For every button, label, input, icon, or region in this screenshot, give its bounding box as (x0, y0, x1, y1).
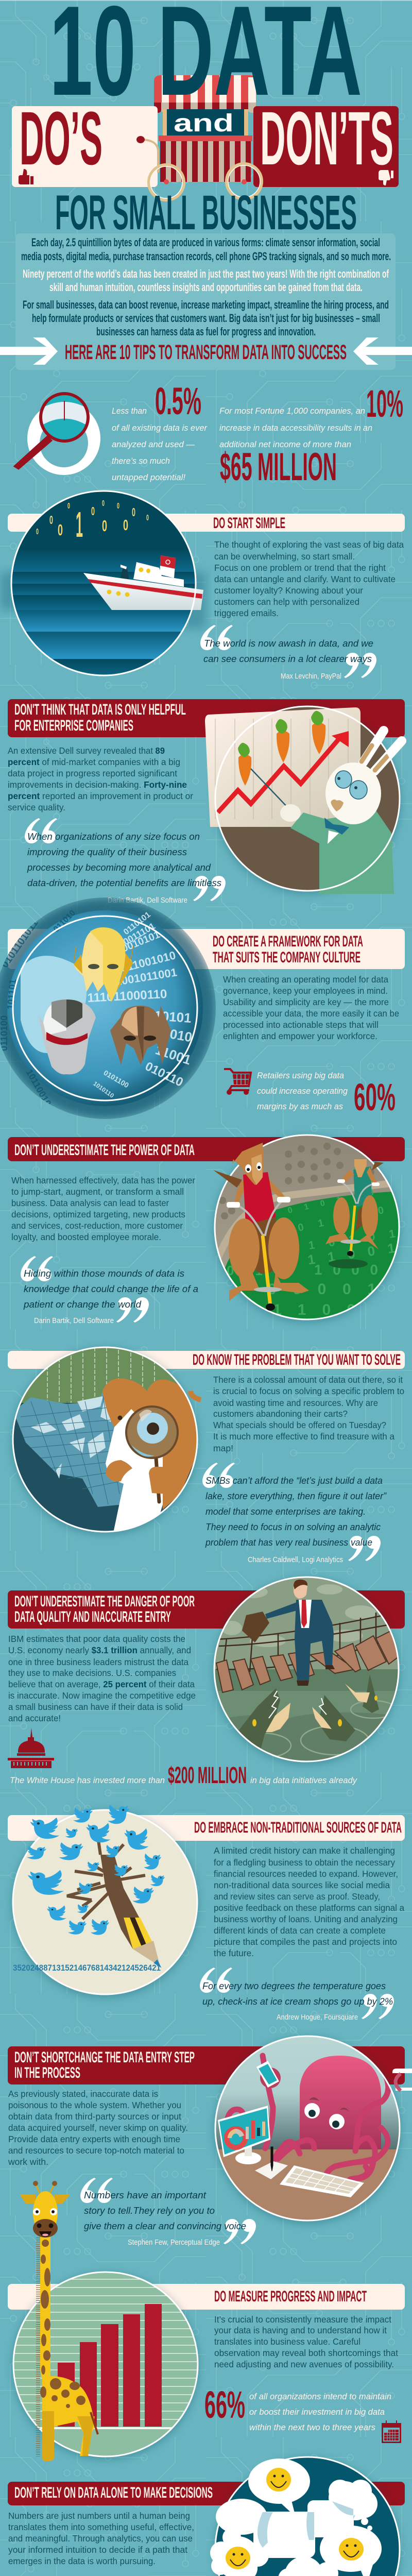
body text: the future. (214, 1948, 254, 1958)
body text: need adjusting and new avenues of possibility. (214, 2359, 394, 2369)
heading text: DATA QUALITY AND INACCURATE ENTRY (14, 1608, 171, 1625)
heading band (8, 2482, 405, 2505)
bubbles (210, 2459, 382, 2576)
body text: and resources to secure top-notch material to (8, 2145, 184, 2156)
heading text: DON’T SHORTCHANGE THE DATA ENTRY STEP (14, 2049, 195, 2066)
paper and pen (255, 2161, 288, 2179)
binary stars: 0 (36, 528, 39, 536)
body text: It’s crucial to consistently measure the impact (214, 2314, 391, 2325)
section 4: don't underestimate the power of data (8, 1133, 405, 1325)
binary stars: 0 (146, 514, 149, 522)
illustration: helmets in a data tunnel: 1001011001 (114, 965, 178, 988)
heading band (8, 2284, 405, 2310)
body text: There is a colossal amount of data out there, so it (213, 1375, 403, 1385)
illustration: businessman on rope bridge over alligators (213, 1575, 400, 1765)
heading band (8, 1815, 405, 1841)
body text: different kinds of data can create a complete (214, 1925, 386, 1936)
icon: closing quote mark (362, 1994, 394, 2019)
binary stars: 0 (91, 504, 95, 518)
body text (8, 2511, 194, 2566)
panel: introduction (0, 233, 412, 370)
quote: Andrew Hogue, Foursquare (277, 2013, 358, 2022)
illustration: helmets in a data tunnel: 0010101 (139, 1007, 192, 1026)
body text: they use to make decisions. U.S. companies (8, 1668, 176, 1678)
body text: is inaccurate. Now imagine the competitive edge (8, 1690, 196, 1701)
quote: They need to focus in on solving an analytic (205, 1521, 381, 1532)
body text: data project in progress reported significant (8, 768, 177, 778)
illustration: helmets in a data tunnel: 101101 (5, 979, 18, 1010)
body text: It is much more effective to find treasure with a (213, 1431, 394, 1442)
icon: closing quote mark (193, 876, 226, 901)
quote: knowledge that could change the life of a (24, 1283, 198, 1294)
quote (80, 2178, 256, 2247)
body text (214, 2314, 398, 2369)
body text: poisonous to the whole system. Whether you (8, 2100, 181, 2110)
body text: observation may reveal both shortcomings that (214, 2348, 398, 2358)
gold helmet (74, 927, 133, 1002)
tree and pencil (67, 1837, 160, 1967)
carrots (238, 711, 325, 786)
stat: 60 percent: Retailers using big data (257, 1071, 344, 1080)
heading text: DON’T UNDERESTIMATE THE POWER OF DATA (14, 1142, 195, 1159)
illustration: dog with magnifying glass over map (12, 1345, 201, 1535)
body text: IBM estimates that poor data quality costs the (8, 1634, 185, 1644)
tentacle with scrap on right edge (392, 2069, 412, 2091)
body text: picture that compiles the past and projects into (214, 1937, 397, 1947)
section 8: don't shortchange data entry (8, 2035, 412, 2247)
icon: thumbs down (379, 170, 393, 185)
section 1: do start simple (0, 489, 405, 681)
number stream: 3520248871315214676814342124526421 (13, 1963, 161, 1973)
quote (200, 625, 376, 681)
stat: 10 percent: additional net income of more than (219, 439, 351, 449)
body text: loyalty, and boosted employee morale. (11, 1232, 161, 1242)
heading text (14, 2049, 195, 2081)
body text (214, 1845, 404, 1958)
intro paragraph 3 (23, 298, 389, 338)
icon: opening quote mark (21, 1256, 53, 1281)
body text: When creating an operating model for data (223, 974, 388, 985)
birds (27, 1804, 165, 1935)
stat: 0.5 percent: Less than (112, 406, 147, 416)
quote: When organizations of any size focus on (27, 831, 200, 842)
body text (214, 539, 404, 618)
body text: percent of mid-market companies with a big (8, 757, 180, 767)
large kangaroo (213, 1143, 309, 1311)
body text: and review sites can serve as proof. Steady, (214, 1891, 380, 1902)
heading band (8, 2046, 405, 2084)
icon: opening quote mark (200, 625, 233, 650)
heading text (14, 701, 186, 734)
stat: 10 percent (219, 382, 403, 489)
heading text: DO START SIMPLE (213, 515, 285, 532)
body text (223, 974, 399, 1041)
quote: SMBs can’t afford the “let’s just build a data (205, 1475, 383, 1486)
stat: 10 percent: increase in data accessibility results in an (219, 423, 372, 433)
section 2: don't think data is only for enterprise (8, 699, 405, 905)
body text: An extensive Dell survey revealed that 89 (8, 745, 165, 756)
body text: your informed intuition to decide if a path that (8, 2545, 187, 2555)
icon: opening quote mark (200, 1968, 232, 1993)
quote: processes by becoming more analytical and (27, 862, 211, 873)
illustration: helmets in a data tunnel: 0101101011 (0, 918, 41, 970)
body text: avoid wasting time and resources. Why are (213, 1398, 378, 1408)
arrow: right pointing (0, 337, 58, 365)
icon: opening quote mark (202, 1463, 235, 1488)
body text (8, 2089, 188, 2167)
body text: one in three business leaders mistrust the data (8, 1657, 188, 1667)
body text: obtain data from third-party sources or input (8, 2111, 181, 2122)
body text: customer loyalty? Knowing about your (214, 585, 363, 596)
body text: improvements in decision-making. Forty-nine (8, 779, 187, 790)
heading band (8, 514, 405, 532)
heading text: FOR ENTERPRISE COMPANIES (14, 717, 133, 734)
body text: work with. (8, 2157, 48, 2167)
binary stars: 0 (102, 499, 105, 508)
illustration: helmets in a data tunnel (0, 897, 216, 1119)
body text: is crucial to focus on solving a specific problem to (213, 1386, 404, 1396)
stat: 0.5 percent: analyzed and used — (112, 439, 195, 449)
illustration: pencil tree with birds (13, 1804, 197, 1996)
body text: can be overwhelming, so start small. (214, 551, 355, 562)
body text: What specials should be offered on Tuesday? (213, 1420, 386, 1430)
quote: lake, store everything, then figure it out later” (205, 1490, 387, 1501)
illustration: ship in a sea of data (0, 489, 206, 680)
body text: triggered emails. (214, 608, 279, 618)
illustration: helmets in a data tunnel: 0101100 (102, 1069, 130, 1090)
body text: The thought of exploring the vast seas of big data (214, 539, 404, 550)
quote: can see consumers in a lot clearer ways (203, 653, 372, 664)
illustration: octopus at a desk (214, 2035, 402, 2224)
illustration: helmets in a data tunnel: 0110101 (122, 910, 152, 937)
smileys (226, 2468, 364, 2569)
section 6: don't underestimate the danger of poor data (8, 1575, 405, 1788)
quote: For every two degrees the temperature goes (202, 1980, 386, 1991)
body text: and meaningful. Through analytics, you can use (8, 2533, 193, 2544)
stat: 66 percent: 66% (204, 2383, 245, 2426)
body text: financial resources needed to expand. However, (214, 1869, 398, 1879)
illustration: kangaroos on pogo sticks: 1 0 0 0 0 (314, 1262, 397, 1278)
keyboard (280, 2165, 364, 2197)
body text: for a fledgling business to obtain the necessary (214, 1857, 395, 1868)
quote (202, 1463, 387, 1564)
intro paragraph 2 (23, 267, 389, 294)
illustration: kangaroos on pogo sticks: 0 1 (227, 1263, 263, 1278)
illustration: rabbit presenting carrot chart (205, 706, 402, 894)
heading text: IN THE PROCESS (14, 2064, 80, 2081)
icon: capitol building (8, 1728, 54, 1768)
illustration: giraffe measuring bar chart (10, 2181, 201, 2461)
illustration: helmets in a data tunnel: 101100101 (24, 1067, 56, 1112)
illustration: helmets in a data tunnel: 111011000110 (87, 987, 167, 1005)
section 7: do embrace non-traditional sources (8, 1804, 405, 2022)
quote: model that some enterprises are taking. (205, 1506, 366, 1517)
body text: governance, keep your employees in mind. (223, 986, 388, 996)
illustration: helmets in a data tunnel: 10011101 (117, 921, 157, 950)
quote (21, 1256, 198, 1325)
body text: emerges in the data is worth pursuing. (8, 2556, 156, 2566)
silver helmet (39, 999, 96, 1074)
quote: Stephen Few, Perceptual Edge (128, 2239, 220, 2247)
stat: 200 million: The White House has invested more than (10, 1775, 165, 1785)
binary stars (36, 499, 149, 545)
quote: patient or change the world (23, 1299, 142, 1310)
binary stars: 0 (102, 517, 107, 535)
body text: A limited credit history can make it challenging (214, 1845, 395, 1856)
body text (11, 1175, 195, 1242)
stat: 0.5 percent: of all existing data is ever (112, 423, 208, 433)
icon: opening quote mark (25, 818, 57, 843)
body text: business worthy of loans. Uniting and analyzing (214, 1914, 398, 1924)
quote: Numbers have an important (84, 2190, 207, 2200)
bridge planks (216, 1631, 399, 1692)
quote: The world is now awash in data, and we (204, 638, 373, 649)
heading band (8, 1590, 405, 1629)
section 6: don't underestimate the danger of poor data: DON’T UNDERESTIMATE THE DANGER OF POOR (14, 1593, 195, 1610)
bronze helmet (110, 1006, 171, 1065)
stat: 200 million: $200 MILLION (168, 1762, 247, 1788)
body text: data can untangle and clarify. Want to cultivate (214, 574, 396, 584)
arrow: left pointing (353, 337, 412, 365)
rabbit (280, 731, 402, 894)
quote: up, check-ins at ice cream shops go up by 2% (202, 1996, 393, 2007)
icon: shopping cart (224, 1069, 251, 1095)
quote: give them a clear and convincing voice (84, 2221, 246, 2231)
heading text: DON'T THINK THAT DATA IS ONLY HELPFUL (14, 701, 186, 718)
quote: story to tell.They rely on you to (84, 2205, 215, 2216)
quote: Darin Bartik, Dell Software (34, 1317, 114, 1325)
quote (25, 818, 226, 905)
illustration: kangaroos on pogo sticks (213, 1133, 402, 1324)
alligators (234, 1674, 396, 1758)
intro paragraph 1 (21, 236, 391, 263)
body text: to jump-start, augment, or transform a small (11, 1187, 184, 1197)
icon: closing quote mark (116, 1297, 149, 1323)
illustration: helmets in a data tunnel: 010110 (143, 1059, 185, 1090)
stat: 0.5 percent: there’s so much (112, 456, 170, 466)
binary stars: 0 (123, 517, 128, 534)
phone (256, 2061, 281, 2088)
section 9: do measure progress (8, 2181, 405, 2461)
businessman (242, 1580, 335, 1686)
stat: 60 percent: margins by as much as (257, 1101, 343, 1111)
illustration: helmets in a data tunnel: 011010 (52, 909, 77, 934)
cart stand (136, 109, 262, 200)
quote: improving the quality of their business (27, 846, 187, 857)
illustration: helmets in a data tunnel: 01010 (154, 1023, 193, 1045)
stat: 60 percent: could increase operating (257, 1086, 348, 1096)
panel: do's (12, 96, 158, 187)
heading text (213, 933, 363, 966)
heading band (8, 699, 405, 737)
body text: customers can help with personalized (214, 597, 359, 607)
binary stars: 0 (67, 502, 70, 511)
label: and: and (174, 110, 234, 137)
illustration: speech bubbles with smileys (210, 2457, 400, 2576)
body text: percent reported an improvement in product or (8, 791, 193, 801)
illustration: kangaroos on pogo sticks: 0 1 0 1 0 (297, 1205, 385, 1234)
stat: 60 percent (257, 1071, 396, 1118)
body text: Numbers are just numbers until a human being (8, 2511, 190, 2521)
body text: As previously stated, inaccurate data is (8, 2089, 158, 2099)
icon: thumbs up (19, 169, 33, 184)
body text: map! (213, 1443, 233, 1453)
body text: believe that on average, 25 percent of their data (8, 1679, 195, 1689)
body text: translates into business value. Careful (214, 2336, 360, 2347)
icon: calendar (382, 2420, 401, 2443)
heading text: DON’T RELY ON DATA ALONE TO MAKE DECISIONS (14, 2484, 213, 2501)
section 5: do know the problem (8, 1345, 405, 1564)
illustration: kangaroos on pogo sticks: 0 0 0 0 1 (268, 1281, 376, 1298)
quote (200, 1968, 394, 2022)
binary stars: 0 (132, 505, 135, 519)
stat: 66 percent (204, 2383, 391, 2432)
monitor (218, 2106, 270, 2164)
section 3: do create a framework (0, 897, 405, 1119)
body text: Usability and simplicity are key — the more (223, 997, 389, 1007)
binary stars: 0 (117, 502, 119, 511)
illustration: kangaroos on pogo sticks: 0 1 0 1 0 0 (287, 1189, 374, 1215)
stat: 0.5 percent: 0.5% (155, 380, 201, 422)
illustration: kangaroos on pogo sticks: 1 1 1 0 0 1 (287, 1240, 396, 1270)
stat: 66 percent: of all organizations intend to maintain (249, 2392, 391, 2401)
illustration: helmets in a data tunnel: 11001 (153, 1042, 193, 1068)
illustration: helmets in a data tunnel: 1010110 (92, 1080, 115, 1099)
heading band (8, 1351, 405, 1369)
binary stars: 1 (76, 504, 83, 545)
body text: Focus on one problem or trend that the right (214, 563, 386, 573)
stat: 200 million: in big data initiatives already (250, 1775, 357, 1785)
body text: enlighten and empower your workforce. (223, 1031, 377, 1041)
body text: processed into actionable steps that will (223, 1020, 379, 1030)
arrow chart line (218, 731, 349, 812)
body text (213, 1375, 404, 1453)
stat: 0.5 percent: untapped potential! (112, 472, 185, 482)
body text: translates them into something useful, effective, (8, 2522, 194, 2532)
body text: U.S. economy nearly $3.1 trillion annually, and (8, 1645, 191, 1655)
stat: 66 percent: or boost their investment in big data (249, 2407, 385, 2417)
bar chart (58, 2304, 162, 2427)
body text: Provide data entry experts with enough time (8, 2134, 180, 2144)
icon: closing quote mark (348, 1536, 381, 1561)
quote: Darin Bartik, Dell Software (108, 896, 187, 905)
body text: a small business can have if their data is solid (8, 1702, 183, 1712)
cart awning (154, 75, 256, 113)
quote: problem that has very real business value (205, 1537, 372, 1548)
body text: decisions, optimized targeting, new products (11, 1209, 185, 1219)
body text: and services, cost-reduction, more customer (11, 1221, 183, 1231)
binary stars: 0 (49, 513, 53, 527)
stat: 0.5 percent (112, 380, 208, 482)
giraffe (20, 2181, 98, 2461)
icon: closing quote mark (344, 653, 376, 678)
body text (8, 1634, 196, 1723)
stat: 10 percent: For most Fortune 1,000 companies, an (219, 406, 365, 416)
panel: don'ts (253, 96, 399, 187)
quote: data-driven, the potential benefits are limitless (27, 877, 221, 888)
panel: do's: DO’S (20, 96, 102, 181)
illustration: helmets in a data tunnel: 0011001010 (113, 948, 177, 976)
binary stars: 0 (58, 521, 63, 539)
section 10: don't rely on data alone (8, 2457, 405, 2576)
illustration: helmets in a data tunnel: 0110010101 (105, 929, 162, 961)
stat: 200 million (10, 1762, 357, 1788)
icon: magnifying glass over iceberg (14, 394, 100, 475)
heading text (14, 1593, 195, 1625)
body text: and accurate! (8, 1713, 61, 1723)
icon: closing quote mark (224, 2219, 256, 2244)
quote: Charles Caldwell, Logi Analytics (248, 1556, 343, 1564)
heading band (8, 1137, 405, 1161)
body text: service quality. (8, 802, 65, 812)
illustration: kangaroos on pogo sticks: 1 1 0 0 (273, 1301, 355, 1318)
eyes (304, 2103, 320, 2119)
stat: 66 percent: within the next two to three years (249, 2422, 375, 2432)
tentacles (227, 2056, 388, 2180)
body text: data acquired yourself, never skimp on quality. (8, 2123, 188, 2133)
quote: Hiding within those mounds of data is (24, 1268, 184, 1279)
heading band (8, 929, 405, 969)
body text: non-traditional data sources like social media (214, 1880, 390, 1890)
body text: accessible your data, the more easily it can be (223, 1008, 399, 1019)
icon: opening quote mark (80, 2178, 113, 2203)
small kangaroo (325, 1159, 384, 1256)
quote: Max Levchin, PayPal (281, 672, 341, 681)
body text: business. Data analysis can lead to faster (11, 1198, 169, 1208)
body text: your data is having and to understand how it (214, 2325, 387, 2335)
body text: positive feedback on these platforms can signal a (214, 1903, 404, 1913)
body text (8, 745, 193, 812)
body text: customers abandoning their carts? (213, 1409, 348, 1419)
body text: When harnessed effectively, data has the power (11, 1175, 195, 1185)
illustration: kangaroos on pogo sticks: 1 0 1 0 1 (307, 1227, 396, 1252)
ship (83, 555, 203, 610)
